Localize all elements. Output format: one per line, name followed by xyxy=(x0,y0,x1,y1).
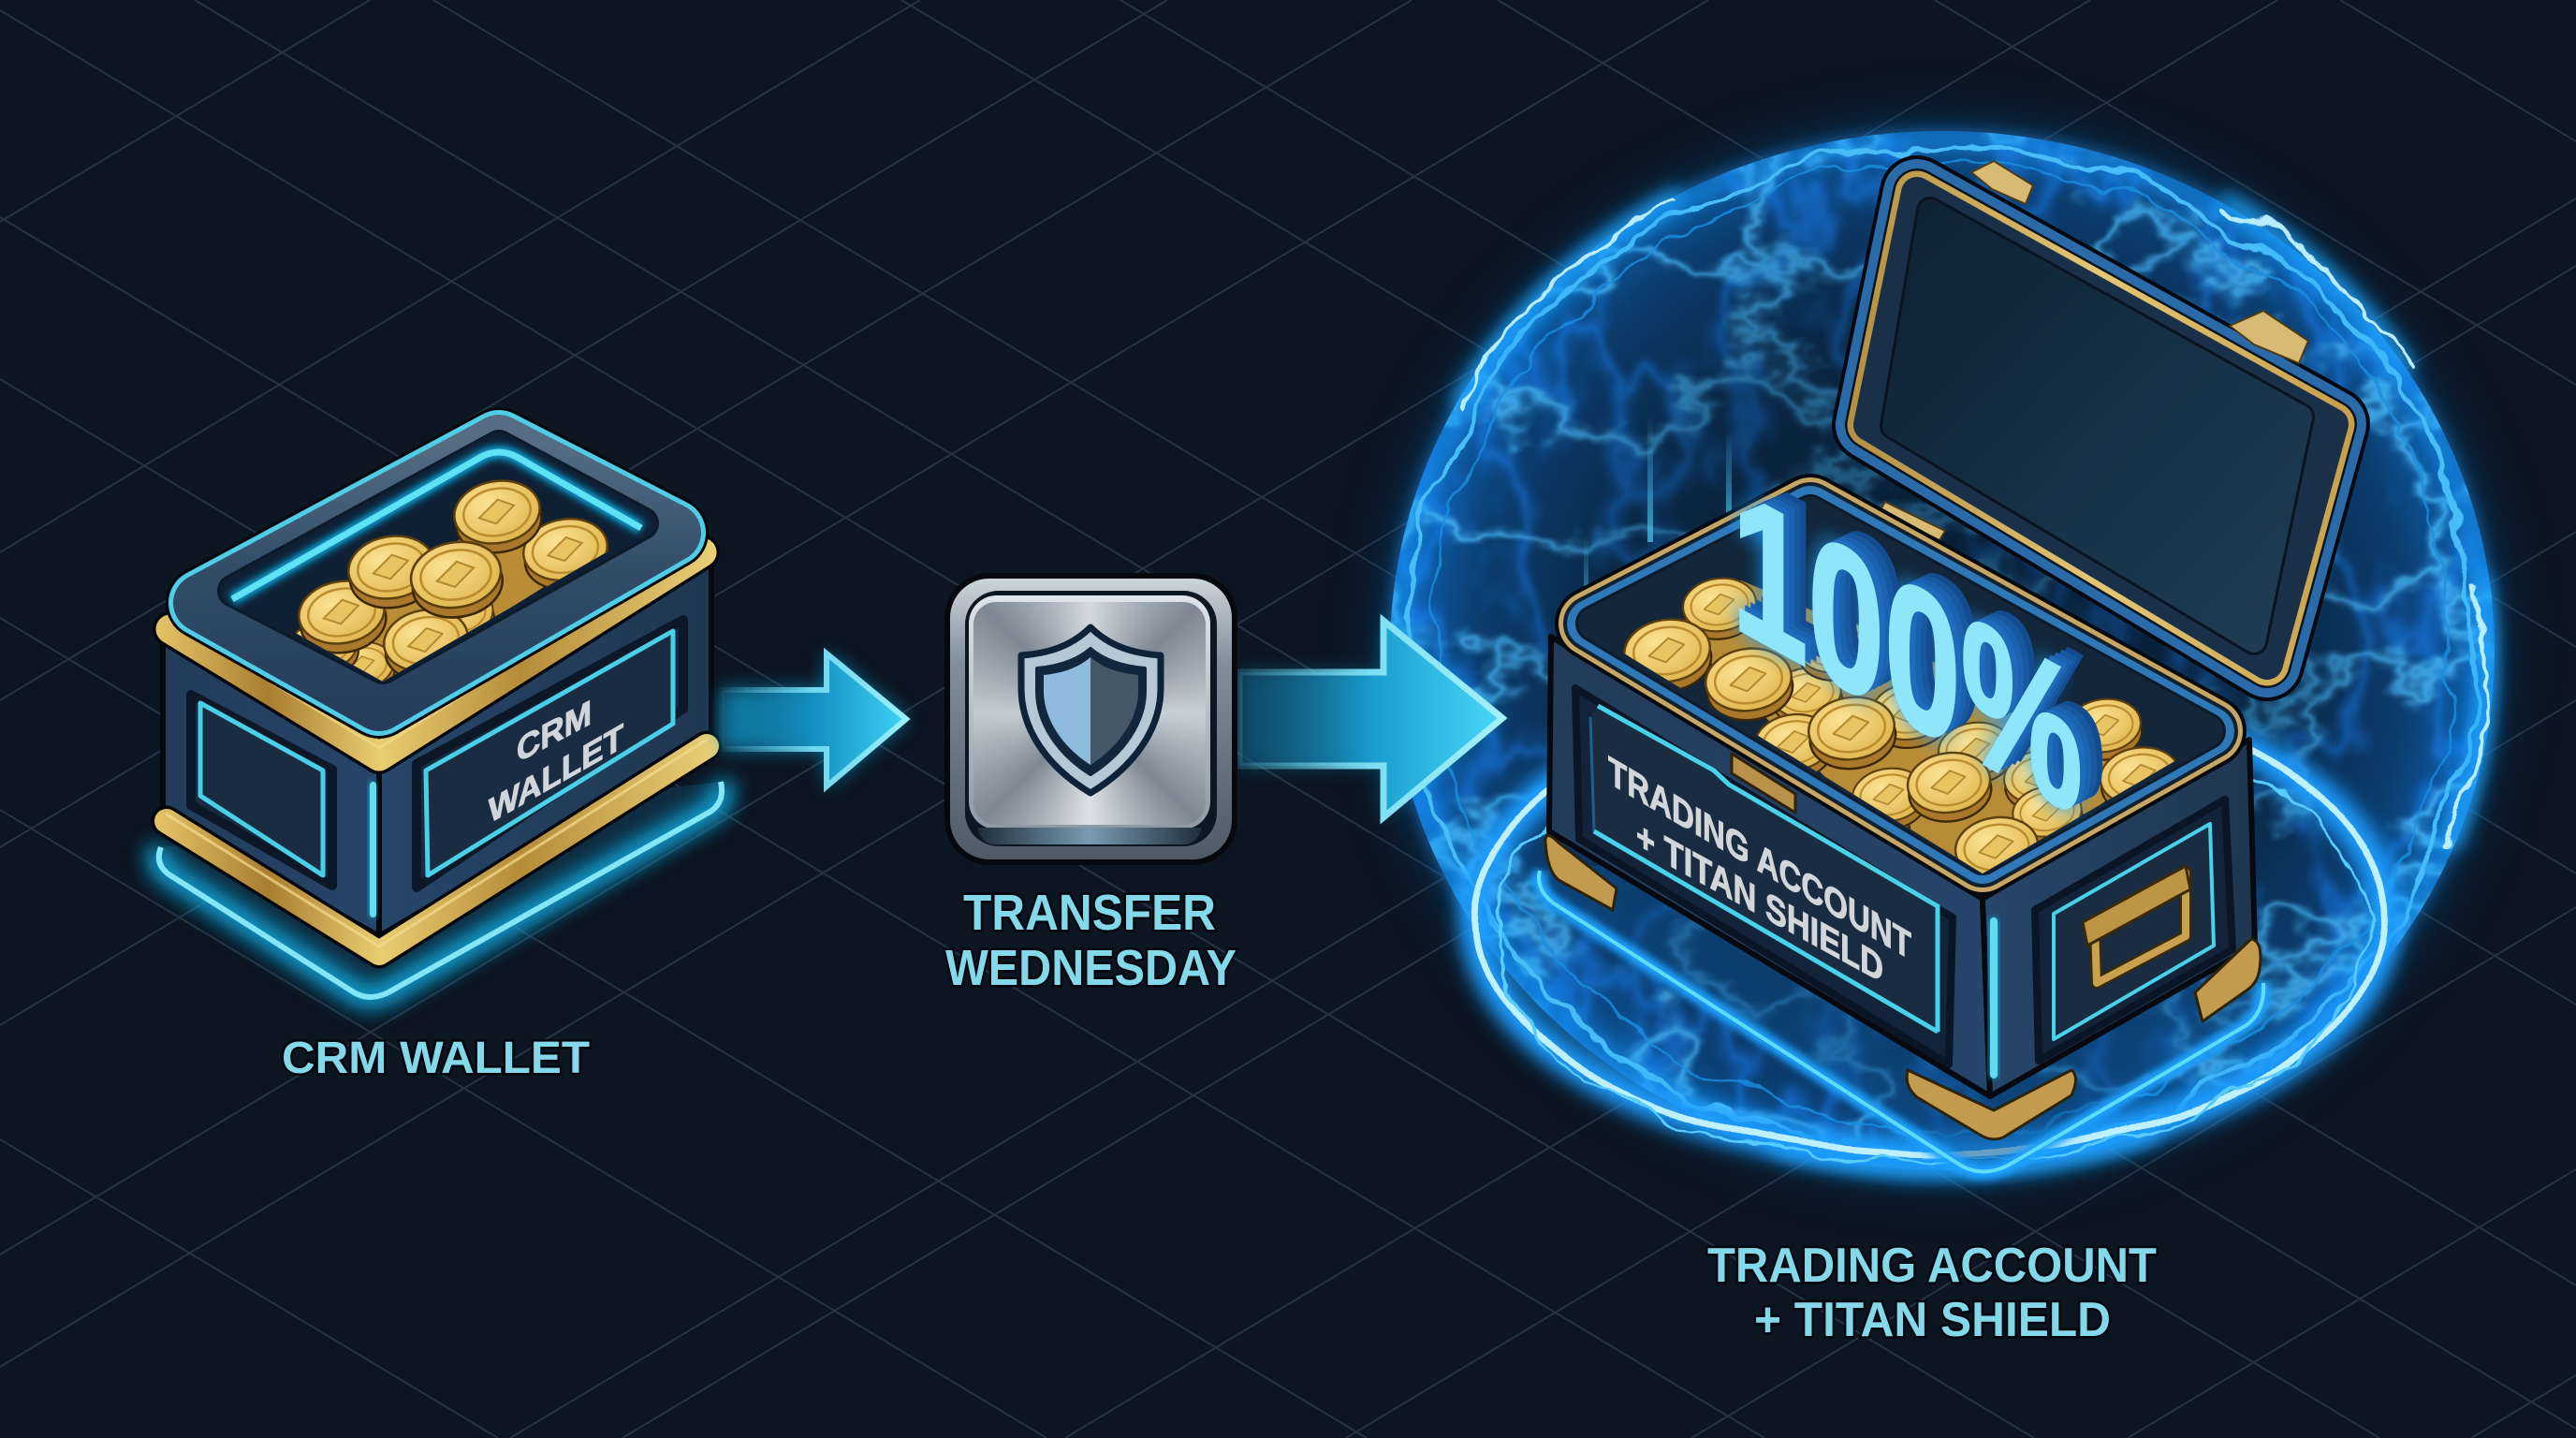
arrow: wallet to transfer xyxy=(722,653,906,786)
3D 100 percent figure: 100% xyxy=(1743,437,2094,856)
engraved label line 2: + TITAN SHIELD xyxy=(1636,812,1883,992)
neon strip xyxy=(1989,917,1998,1078)
top gold band xyxy=(170,544,702,756)
engraved label line 1: TRADING ACCOUNT xyxy=(1608,747,1911,969)
label: trading account and Titan Shield: + TITAN SHIELD xyxy=(1754,1293,2111,1347)
chest lid frame xyxy=(202,444,672,702)
label: trading account and Titan Shield: TRADING ACCOUNT xyxy=(1707,1239,2157,1293)
gold handle xyxy=(2083,866,2190,983)
open lid xyxy=(1869,161,2333,701)
gold corner feet xyxy=(1545,835,2261,1139)
left panel xyxy=(191,695,332,886)
front panel with engraved text xyxy=(417,620,683,888)
front latch xyxy=(1732,754,1795,813)
chest body xyxy=(1549,637,2255,1096)
metal shield button xyxy=(950,579,1232,859)
protective sphere xyxy=(1376,112,2509,1189)
chest rim and opening with coins xyxy=(1591,510,2210,891)
energy ring around chest xyxy=(1475,682,2385,1161)
glowing floor plate xyxy=(159,782,722,997)
3D 100 percent figure: 100% xyxy=(1732,443,2083,861)
label: trading account and Titan Shield xyxy=(1707,1239,2157,1347)
bottom gold band xyxy=(167,740,707,953)
neon centre strip xyxy=(369,782,376,917)
3D 100 percent figure xyxy=(1732,432,2105,861)
label: CRM wallet: CRM WALLET xyxy=(282,1034,590,1083)
chest opening with coins xyxy=(232,447,642,701)
floor plate xyxy=(1539,843,2263,1172)
label: transfer Wednesday: TRANSFER xyxy=(963,885,1216,941)
front panel with engraved text xyxy=(1575,688,1953,1064)
3D 100 percent figure: 100% xyxy=(1737,440,2088,858)
arrow: transfer to trading account xyxy=(1239,621,1502,817)
chest body xyxy=(163,552,711,936)
bright rim arcs xyxy=(1460,197,2487,1171)
label: transfer Wednesday: WEDNESDAY xyxy=(945,940,1237,996)
3D 100 percent figure: 100% xyxy=(1754,432,2105,850)
rising light beams xyxy=(1584,416,1732,627)
chest: CRM wallet xyxy=(159,444,722,997)
lid hinges xyxy=(1880,161,2308,701)
3D 100 percent figure: 100% xyxy=(1749,434,2100,853)
engraved label CRM: CRM xyxy=(517,693,592,770)
3D 100 percent figure: 100% xyxy=(1732,443,2083,861)
icon: shield xyxy=(1018,624,1164,796)
side panel with handle xyxy=(2035,800,2232,1061)
chest: trading account xyxy=(1539,161,2333,1172)
engraved label WALLET: WALLET xyxy=(489,716,623,831)
label: transfer Wednesday xyxy=(945,885,1237,996)
lid glass xyxy=(1894,211,2301,641)
